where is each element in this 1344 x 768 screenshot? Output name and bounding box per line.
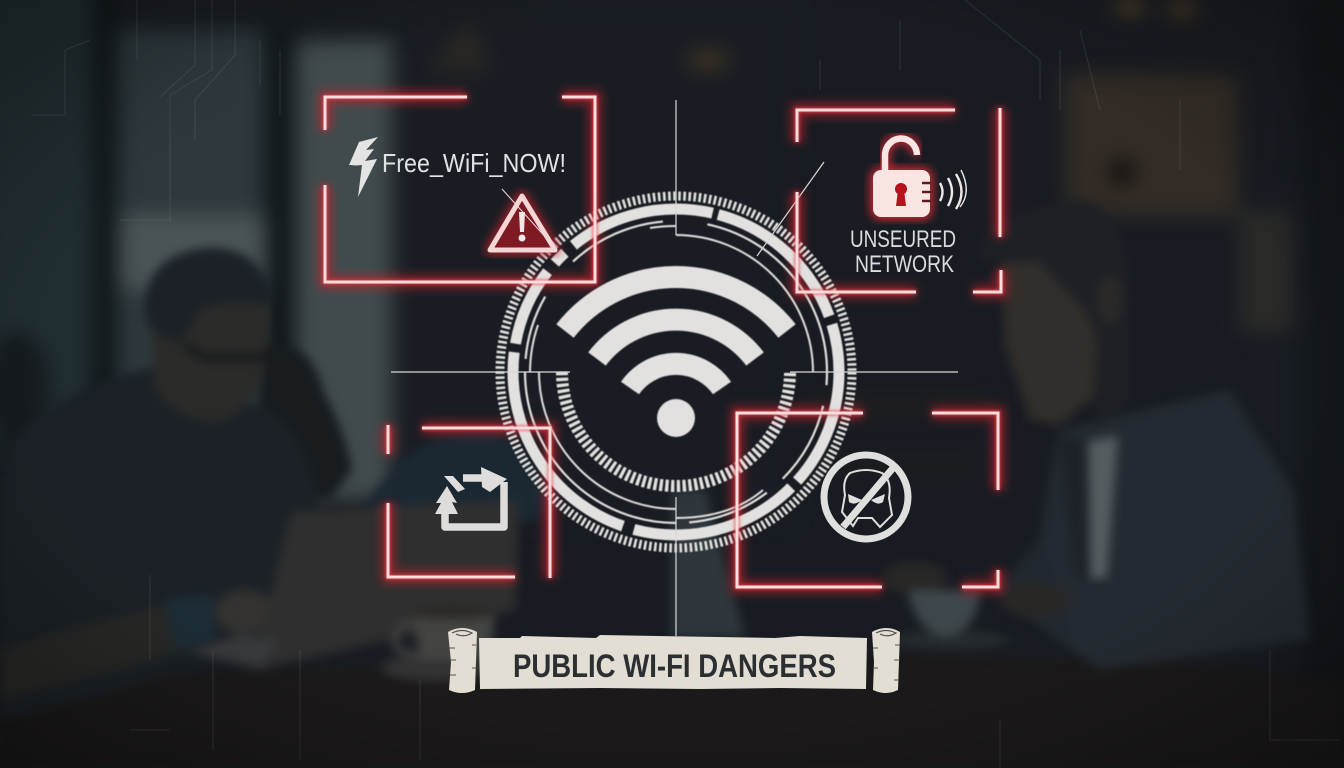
label: unsecured network [850, 226, 956, 278]
banner title: PUBLIC WI-FI DANGERS [513, 648, 836, 684]
right cup [890, 631, 1010, 649]
icon: open padlock with signal waves [873, 139, 966, 217]
short inner arcs and rings [539, 235, 813, 509]
icon: warning triangle [490, 189, 557, 250]
red neon frames [325, 97, 1001, 587]
left scroll roller [448, 628, 477, 693]
right man's jacket [993, 390, 1310, 670]
icon: redirect arrows box [435, 467, 507, 527]
frame: data transfer [388, 425, 550, 578]
icon: lightning bolt [349, 137, 378, 197]
label: Free_WiFi_NOW!: Free_WiFi_NOW! [382, 148, 566, 178]
title banner scroll [448, 628, 900, 693]
right man's head [1002, 260, 1100, 425]
crosshair lines [391, 100, 958, 636]
central Wi-Fi radar dial [500, 196, 852, 548]
left cup [381, 655, 493, 681]
outer tick ring [500, 196, 852, 548]
label: unsecured network: UNSEURED [850, 226, 956, 253]
rear silhouette [255, 347, 352, 500]
right scroll roller [872, 628, 900, 693]
red neon frames glow [325, 97, 1001, 587]
segmented thick ring [513, 209, 839, 535]
frame: free wifi [325, 97, 595, 282]
icon: crossed-out skull [824, 455, 908, 539]
table [0, 655, 1344, 768]
center screen [672, 490, 745, 637]
label: unsecured network: NETWORK [855, 251, 954, 278]
inner tick arc [562, 372, 790, 486]
parchment ribbon [479, 635, 867, 689]
Wi-Fi arcs [565, 277, 787, 388]
laptop [188, 500, 519, 669]
left man's body [0, 368, 318, 720]
frame: unsecured network [797, 108, 1001, 292]
frame: hacker [737, 413, 998, 587]
thin broken ring [525, 221, 827, 523]
hands [883, 562, 947, 594]
left man's head [150, 300, 270, 421]
